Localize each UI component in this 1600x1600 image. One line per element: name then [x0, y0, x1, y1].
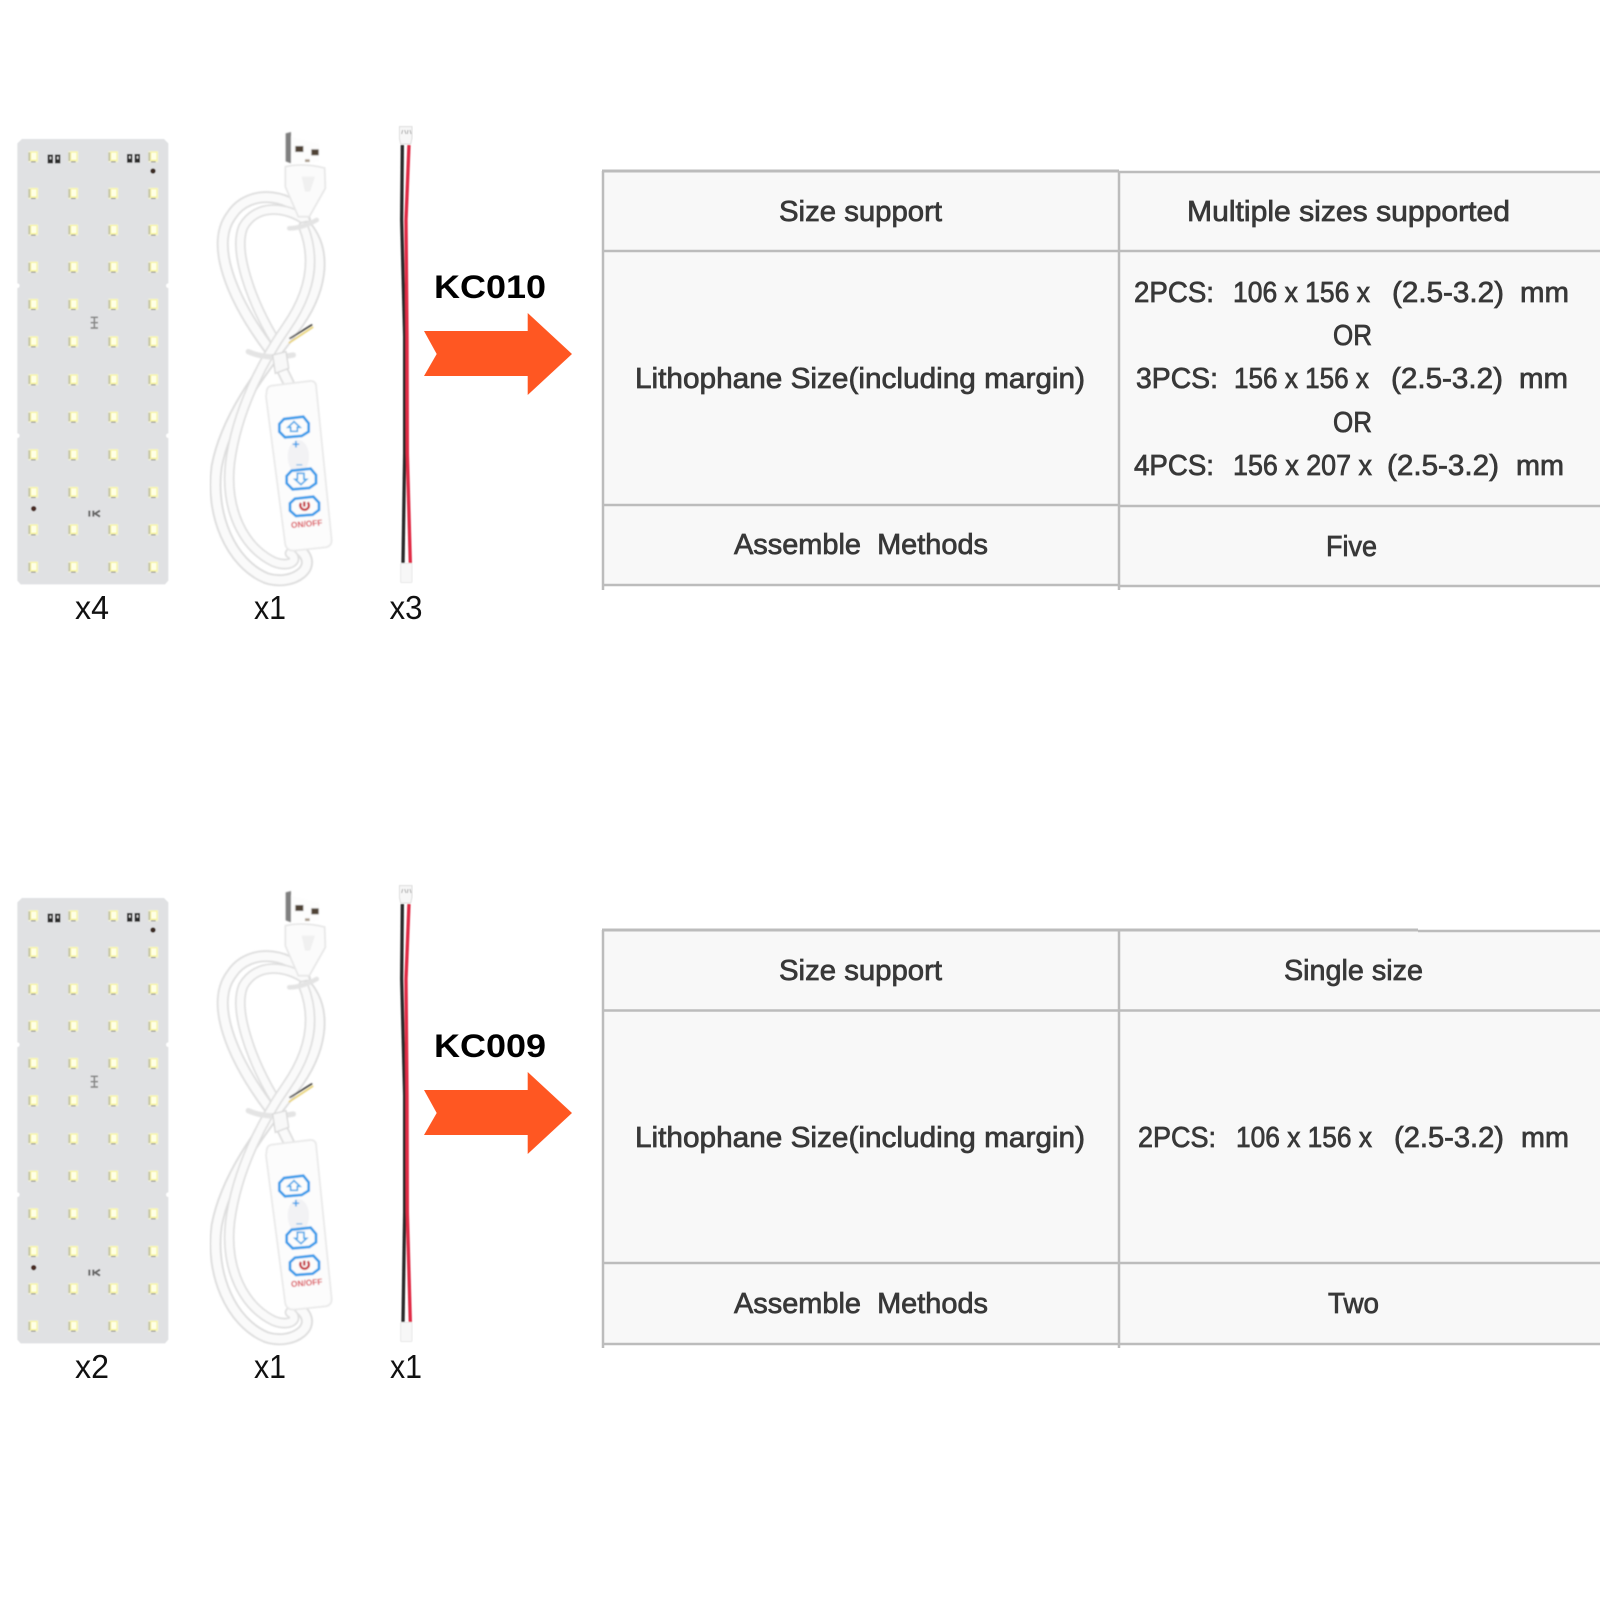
- quantity label x1: x1: [254, 589, 286, 626]
- row: size support: Size support: [779, 196, 942, 228]
- row: lithophane size: mm: [1519, 363, 1568, 395]
- row: lithophane size: Lithophane Size(including margin): [635, 363, 1085, 395]
- USB plug: [285, 132, 325, 217]
- row: lithophane size: 2PCS:: [1138, 1122, 1216, 1154]
- row: lithophane size: 4PCS:: [1134, 450, 1214, 482]
- arrow: [424, 1072, 572, 1154]
- table: KC009 specs: [602, 930, 1600, 1348]
- row: lithophane size: 3PCS:: [1136, 363, 1218, 395]
- arrow: [424, 313, 572, 395]
- row: lithophane size: 156 x 207 x: [1233, 450, 1372, 482]
- connector: [273, 1111, 289, 1132]
- model name KC009: KC009: [434, 1028, 546, 1064]
- dimmer switch: –: [296, 457, 303, 471]
- row: assemble methods: Five: [1326, 531, 1377, 563]
- row: lithophane size: mm: [1521, 1122, 1569, 1154]
- row: assemble methods: [734, 1288, 1379, 1320]
- row: lithophane size: (2.5-3.2): [1387, 450, 1499, 482]
- row: lithophane size: Lithophane Size(including margin): [635, 1122, 1085, 1154]
- row: lithophane size: [635, 277, 1569, 482]
- dimmer switch: [266, 1140, 332, 1310]
- row: assemble methods: Assemble Methods: [734, 529, 988, 561]
- row: lithophane size: OR: [1333, 320, 1372, 352]
- row: size support: [779, 955, 1423, 987]
- dimmer switch: +: [292, 437, 300, 451]
- dimmer switch: [266, 381, 332, 551]
- row: lithophane size: mm: [1516, 450, 1564, 482]
- row: assemble methods: Two: [1328, 1288, 1379, 1320]
- section: KC009 kit: [17, 886, 1600, 1385]
- quantity label x4: x4: [75, 589, 109, 626]
- USB dimmer cable: [215, 132, 332, 580]
- row: assemble methods: Assemble Methods: [734, 1288, 988, 1320]
- quantity label x3: x3: [390, 589, 422, 626]
- row: lithophane size: 156 x 156 x: [1234, 363, 1369, 395]
- quantity label x1: x1: [390, 1348, 422, 1385]
- dimmer switch: –: [296, 1216, 303, 1230]
- row: lithophane size: (2.5-3.2): [1394, 1122, 1504, 1154]
- connector wire: [399, 127, 412, 583]
- connector: [273, 352, 289, 373]
- dimmer switch: +: [292, 1196, 300, 1210]
- connector wire: [399, 886, 412, 1342]
- model name KC010: KC010: [434, 269, 546, 305]
- row: lithophane size: OR: [1333, 407, 1372, 439]
- row: lithophane size: (2.5-3.2): [1392, 277, 1504, 309]
- row: size support: Size support: [779, 955, 942, 987]
- table: KC010 specs: [602, 171, 1600, 590]
- USB dimmer cable: [215, 891, 332, 1339]
- quantity label x2: x2: [75, 1348, 109, 1385]
- dimmer switch: ON/OFF: [291, 1276, 323, 1289]
- row: size support: Multiple sizes supported: [1187, 196, 1510, 228]
- row: size support: Single size: [1284, 955, 1423, 987]
- USB plug: [285, 891, 325, 976]
- row: size support: [779, 196, 1510, 228]
- quantity label x1: x1: [254, 1348, 286, 1385]
- row: lithophane size: 106 x 156 x: [1236, 1122, 1372, 1154]
- row: lithophane size: (2.5-3.2): [1391, 363, 1503, 395]
- row: lithophane size: 106 x 156 x: [1233, 277, 1370, 309]
- row: assemble methods: [734, 529, 1377, 563]
- LED board KC010: [17, 139, 168, 584]
- dimmer switch: ON/OFF: [291, 517, 323, 530]
- section: KC010 kit: [17, 127, 1600, 626]
- row: lithophane size: 2PCS:: [1134, 277, 1214, 309]
- LED board KC009: [17, 898, 168, 1343]
- row: lithophane size: mm: [1520, 277, 1569, 309]
- row: lithophane size: [635, 1122, 1569, 1154]
